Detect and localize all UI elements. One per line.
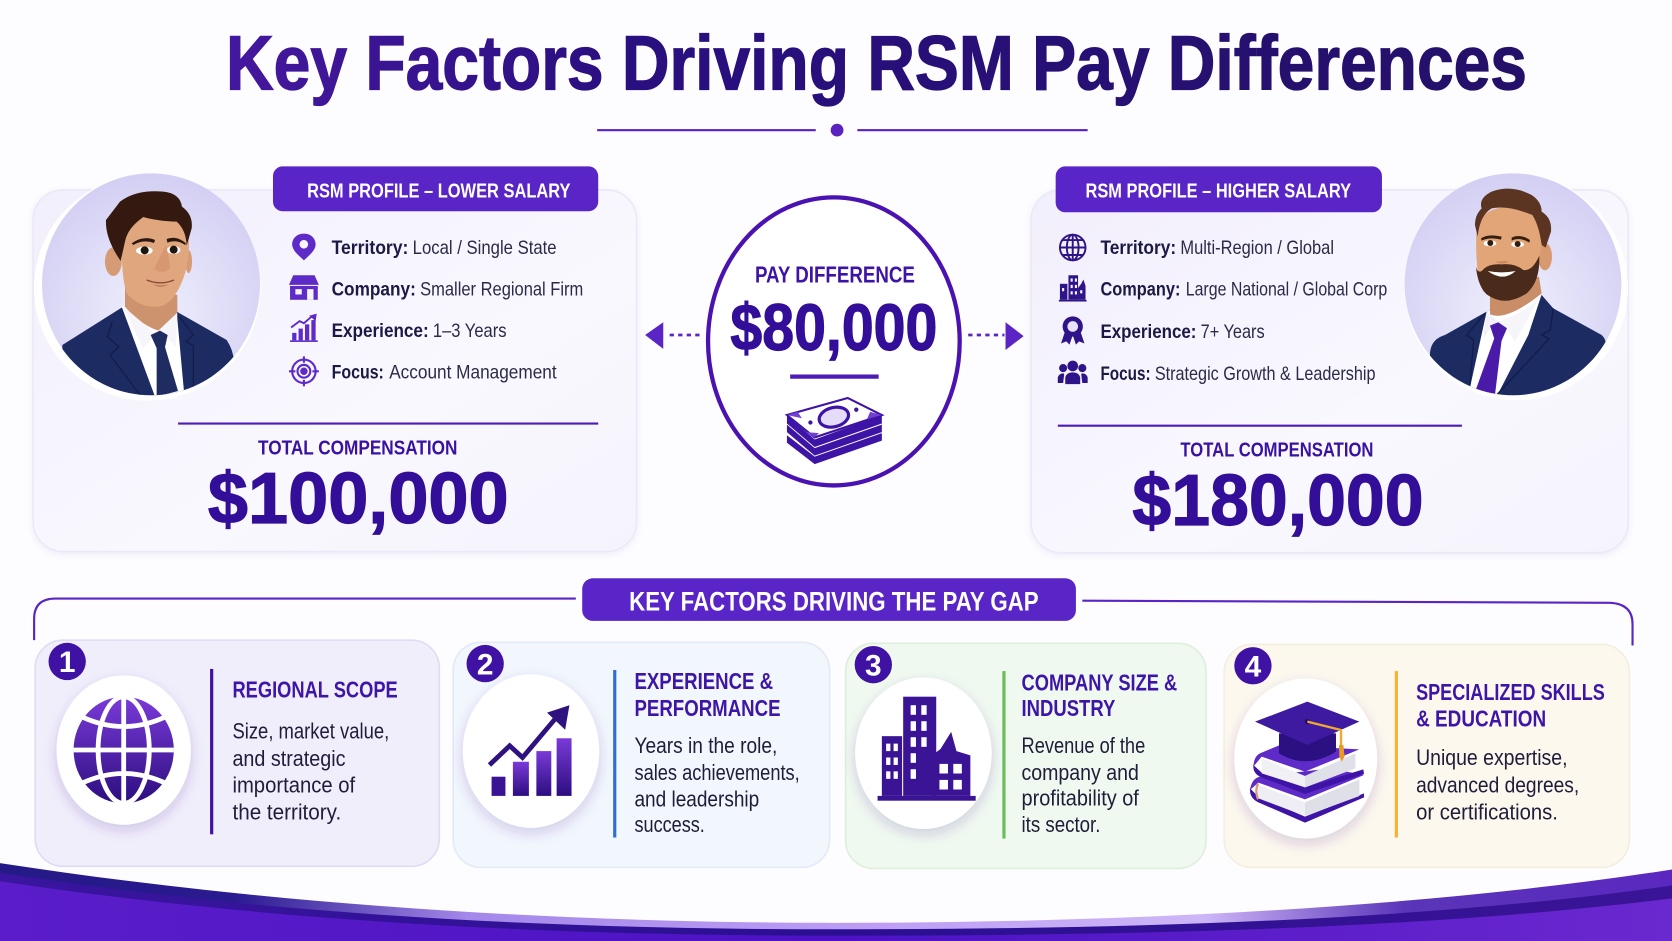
number badge 4	[1234, 647, 1272, 684]
text: company	[1100, 279, 1387, 301]
text: experience: 7+ Years	[1201, 321, 1265, 343]
text: company: Smaller Regional Firm	[420, 279, 583, 301]
accent line	[1002, 671, 1006, 839]
icon: globe in circle	[57, 675, 191, 825]
icon: location pin	[292, 234, 316, 260]
text: experience: Experience:	[332, 320, 429, 342]
card background	[846, 643, 1206, 868]
oval outline	[708, 197, 960, 485]
text: territory: Local / Single State	[413, 237, 557, 259]
section heading: key factors: KEY FACTORS DRIVING THE PAY GAP	[629, 586, 1039, 616]
icon: globe	[1060, 235, 1086, 260]
icon: award ribbon	[1061, 316, 1084, 345]
number badge 3: 3	[865, 649, 882, 682]
avatar: younger RSM	[34, 173, 261, 405]
description: advanced degrees,	[1416, 773, 1579, 798]
text: territory	[332, 237, 557, 259]
card background	[453, 642, 830, 867]
description: the territory.	[232, 799, 341, 824]
icon: target	[289, 356, 319, 386]
panel background	[33, 190, 637, 552]
accent line	[1395, 671, 1398, 838]
heading: experience and performance	[634, 668, 781, 721]
label: total compensation: TOTAL COMPENSATION	[258, 437, 457, 459]
avatar: senior RSM	[1405, 173, 1628, 405]
heading: regional scope: REGIONAL SCOPE	[232, 677, 398, 703]
card background	[35, 640, 439, 866]
description: Size, market value,	[232, 718, 389, 743]
panel background	[1031, 190, 1628, 553]
description	[634, 733, 800, 837]
description	[232, 718, 389, 824]
value: lower salary: $100,000	[208, 458, 509, 539]
divider: lower compensation	[178, 422, 598, 425]
icon: storefront	[289, 275, 319, 300]
text: experience: 1–3 Years	[433, 320, 507, 342]
number badge 2: 2	[477, 648, 493, 681]
accent line	[613, 670, 616, 838]
text: focus: Account Management	[389, 362, 557, 384]
description: its sector.	[1022, 812, 1100, 837]
icon: buildings in circle	[855, 677, 992, 829]
accent line	[210, 669, 213, 834]
heading: specialized skills and education: SPECIALIZED SKILLS	[1416, 679, 1605, 705]
description: Unique expertise,	[1416, 745, 1568, 770]
text: experience: Experience:	[1100, 321, 1196, 343]
number badge 4: 4	[1245, 650, 1262, 683]
heading: company size and industry: COMPANY SIZE &	[1022, 669, 1177, 695]
short rule	[790, 374, 879, 379]
label: pay difference: PAY DIFFERENCE	[755, 262, 915, 288]
description: Years in the role,	[634, 733, 777, 758]
text: focus: Focus:	[332, 362, 384, 384]
panel: lower salary profile	[33, 166, 637, 552]
heading: experience and performance: EXPERIENCE &	[634, 668, 773, 694]
panel: factor 2 experience and performance	[453, 642, 830, 867]
description: profitability of	[1022, 785, 1140, 811]
label: total compensation: TOTAL COMPENSATION	[1180, 440, 1373, 462]
description	[1022, 733, 1145, 837]
arrow: left	[645, 322, 702, 349]
heading badge: lower salary: RSM PROFILE – LOWER SALARY	[307, 180, 571, 202]
footer wave	[0, 863, 1672, 941]
callout: pay difference	[708, 197, 960, 485]
heading badge: higher salary: RSM PROFILE – HIGHER SALARY	[1086, 180, 1351, 202]
value: pay difference: $80,000	[730, 291, 937, 365]
heading badge: lower salary	[273, 166, 598, 211]
heading: company size and industry	[1022, 669, 1177, 721]
text: territory: Territory:	[1100, 237, 1176, 259]
text: experience	[332, 320, 507, 342]
description: or certifications.	[1416, 799, 1558, 824]
description	[1416, 745, 1579, 824]
heading badge: higher salary	[1056, 166, 1382, 212]
text: territory: Territory:	[332, 237, 408, 259]
heading: specialized skills and education	[1416, 679, 1605, 732]
text: company: Company:	[1100, 279, 1180, 301]
panel: factor 3 company size and industry	[846, 643, 1206, 868]
icon: growth chart	[290, 314, 318, 342]
heading: company size and industry: INDUSTRY	[1022, 695, 1116, 721]
number badge 1: 1	[59, 646, 75, 679]
text: territory: Multi-Region / Global	[1180, 237, 1334, 259]
text: company: Company:	[332, 279, 416, 301]
description: and leadership	[634, 787, 759, 812]
text: company	[332, 279, 583, 301]
panel: higher salary profile	[1031, 166, 1628, 553]
panel: factor 1 regional scope	[35, 640, 439, 866]
description: sales achievements,	[634, 760, 800, 785]
icon: team	[1058, 361, 1088, 384]
icon: money stack	[787, 398, 882, 464]
description: and strategic	[232, 746, 345, 771]
text: focus: Focus:	[1100, 363, 1151, 385]
text: territory	[1100, 237, 1334, 259]
value: higher salary: $180,000	[1132, 460, 1424, 541]
number badge 2	[467, 645, 504, 682]
text: focus	[1100, 363, 1376, 385]
number badge 1	[49, 643, 86, 680]
section frame lines	[34, 599, 1633, 645]
icon: graduation cap and books	[1234, 679, 1377, 839]
title divider	[597, 124, 1088, 137]
text: company: Large National / Global Corp	[1186, 279, 1387, 301]
description: company and	[1022, 760, 1139, 785]
description: Revenue of the	[1022, 733, 1145, 758]
divider: higher compensation	[1058, 425, 1462, 427]
icon: office buildings	[1059, 275, 1087, 302]
card background	[1224, 644, 1629, 867]
panel: factor 4 specialized skills and education	[1224, 644, 1629, 867]
text: focus: Strategic Growth & Leadership	[1155, 363, 1376, 385]
description: success.	[634, 812, 705, 837]
heading: specialized skills and education: & EDUCATION	[1416, 706, 1546, 732]
arrow: right	[968, 322, 1024, 350]
section heading: key factors	[582, 578, 1076, 621]
number badge 3	[855, 646, 892, 683]
text: experience	[1100, 321, 1265, 343]
text: focus	[332, 362, 557, 384]
icon: chart in circle	[463, 674, 599, 828]
heading: experience and performance: PERFORMANCE	[634, 695, 781, 721]
description: importance of	[232, 773, 356, 798]
